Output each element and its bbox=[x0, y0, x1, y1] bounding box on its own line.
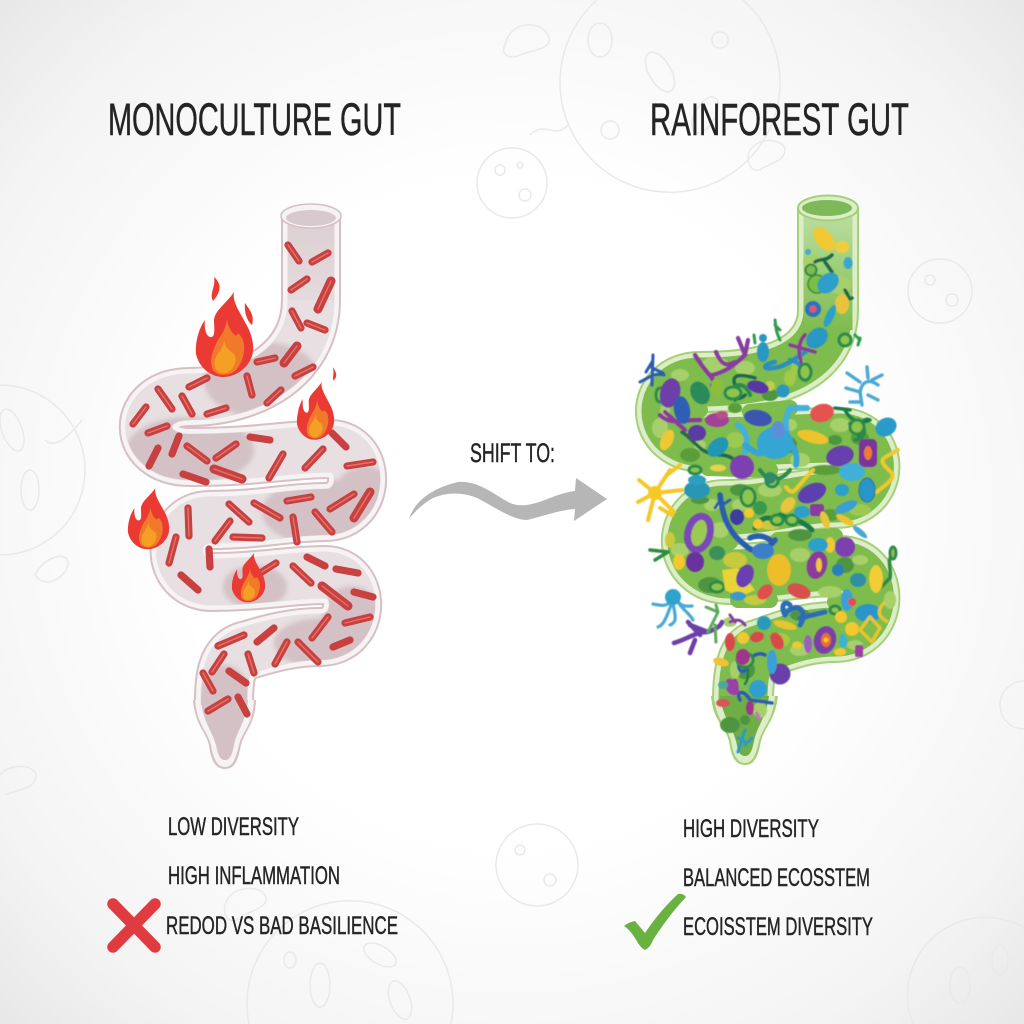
rainforest gut illustration bbox=[638, 196, 900, 765]
red rod bacteria bbox=[133, 245, 373, 714]
shift to label: SHIFT TO: bbox=[470, 438, 555, 468]
flame: right of upper bend bbox=[297, 367, 336, 440]
title: monoculture gut: MONOCULTURE GUT bbox=[108, 94, 401, 145]
text: redod vs bad basilience: REDOD VS BAD BASILIENCE bbox=[166, 912, 398, 940]
text: balanced ecosstem: BALANCED ECOSSTEM bbox=[683, 864, 870, 892]
text: ecoisstem diversity: ECOISSTEM DIVERSITY bbox=[683, 913, 873, 941]
branching filaments bbox=[638, 255, 898, 752]
flame: left edge bbox=[128, 488, 169, 549]
tube opening rim bbox=[798, 196, 858, 220]
shift arrow bbox=[409, 478, 607, 521]
flame: small lower bbox=[232, 553, 265, 602]
rainforest outcomes list bbox=[683, 815, 873, 941]
icon: red cross bbox=[113, 904, 155, 947]
monoculture gut illustration bbox=[126, 204, 393, 769]
darker shaded folds bbox=[126, 342, 393, 765]
colourful microbe cells bbox=[648, 223, 900, 721]
monoculture outcomes list bbox=[166, 813, 398, 940]
text: high inflammation: HIGH INFLAMMATION bbox=[168, 862, 340, 890]
text: low diversity: LOW DIVERSITY bbox=[168, 813, 299, 841]
gut tube outline bbox=[149, 216, 357, 769]
background green patches bbox=[652, 254, 896, 733]
green gut tube bbox=[666, 208, 869, 765]
text: high diversity: HIGH DIVERSITY bbox=[683, 815, 819, 843]
flame: large bbox=[196, 277, 253, 377]
icon: green check bbox=[624, 894, 686, 950]
tube opening rim bbox=[281, 204, 341, 228]
dark green ring microbes bbox=[656, 334, 896, 667]
microbe community bbox=[638, 223, 900, 752]
